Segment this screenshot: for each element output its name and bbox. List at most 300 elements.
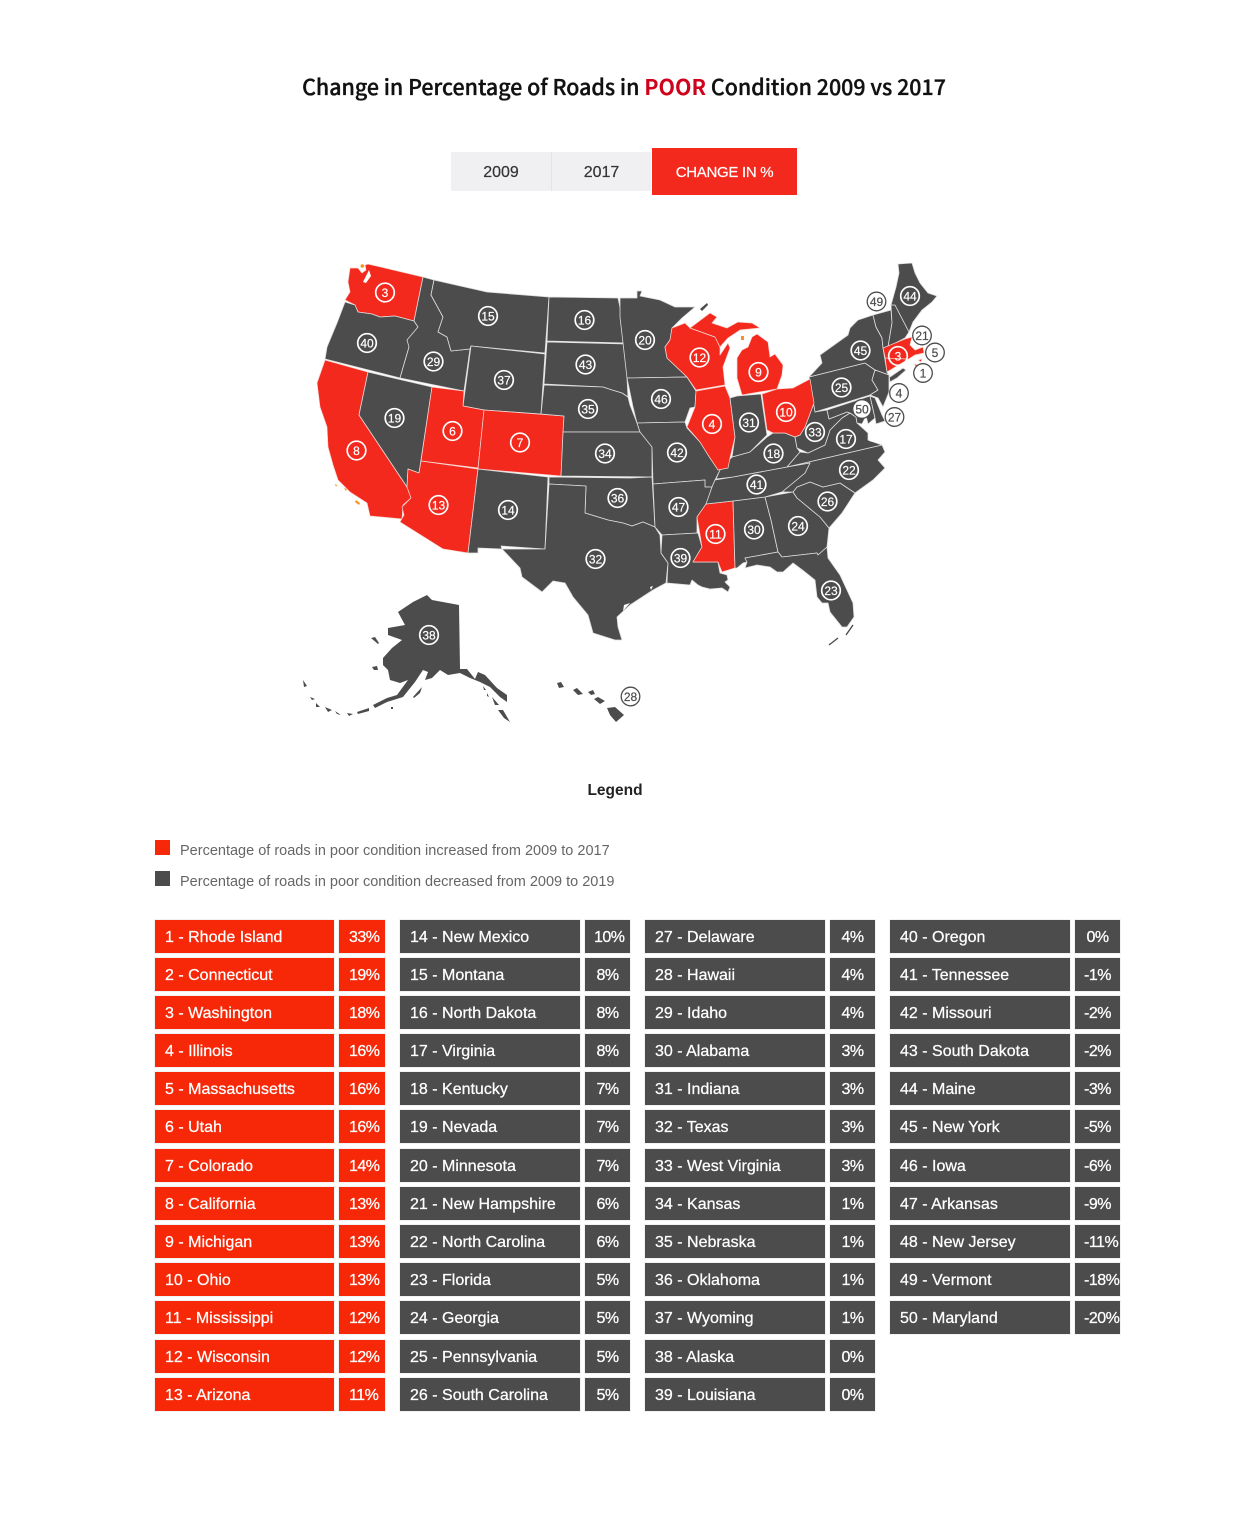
row 27: 27 - Delaware — [655, 929, 755, 946]
row 26 — [399, 1377, 631, 1412]
state: Delaware and Delmarva — [870, 396, 885, 424]
badge: 11 — [706, 525, 725, 543]
row 39: 39 - Louisiana — [655, 1387, 756, 1404]
row 3 — [154, 995, 386, 1030]
state: Oklahoma — [549, 477, 655, 527]
badge: 21 outside — [913, 326, 931, 345]
badge: 9 — [749, 363, 768, 381]
row 24 — [399, 1300, 631, 1335]
row 47: -9% — [1084, 1196, 1111, 1213]
row 23: 23 - Florida — [410, 1272, 491, 1289]
row 8 — [154, 1186, 386, 1221]
row 11 — [154, 1300, 386, 1335]
row 20 — [399, 1148, 631, 1183]
badge: 34: 34 — [598, 447, 612, 461]
state: Nebraska — [541, 385, 640, 432]
row 43: -2% — [1084, 1043, 1111, 1060]
row 5: 5 - Massachusetts — [165, 1081, 295, 1098]
state: New Hampshire — [888, 305, 909, 347]
row 34 — [644, 1186, 876, 1221]
state: Colorado — [478, 410, 564, 476]
badge: 27 outside — [885, 408, 904, 426]
badge: 39: 39 — [674, 552, 687, 566]
state: Maryland — [827, 396, 875, 424]
badge: 6: 6 — [449, 424, 456, 438]
badge: 4 outside: 4 — [896, 386, 903, 400]
badge: 4 Illinois — [703, 415, 721, 433]
badge: 38 — [420, 626, 438, 644]
row 41: 41 - Tennessee — [900, 967, 1009, 984]
badge: 17: 17 — [839, 432, 853, 446]
row 9: 13% — [349, 1234, 380, 1251]
row 40: 40 - Oregon — [900, 929, 985, 946]
badge: 37 — [495, 371, 513, 389]
row 10: 13% — [349, 1272, 380, 1289]
badge: 10 — [777, 403, 795, 421]
badge: 45: 45 — [854, 344, 867, 358]
row 21 — [399, 1186, 631, 1221]
row 4 — [154, 1033, 386, 1068]
row 18: 18 - Kentucky — [410, 1081, 508, 1098]
row 1: 1 - Rhode Island — [165, 929, 282, 946]
state: Nevada — [359, 372, 432, 487]
state: Idaho — [400, 277, 470, 391]
state: Illinois — [687, 386, 735, 470]
badge: 49 outside — [867, 292, 886, 311]
row 15: 8% — [596, 967, 619, 984]
badge: 15: 15 — [481, 310, 495, 324]
row 20: 20 - Minnesota — [410, 1158, 516, 1175]
badge: 16: 16 — [578, 314, 591, 328]
row 29 — [644, 995, 876, 1030]
badge: 46 — [652, 390, 670, 408]
state: California — [317, 360, 411, 519]
row 6: 6 - Utah — [165, 1119, 222, 1136]
badge: 10: 10 — [779, 406, 793, 420]
row 5: 16% — [349, 1081, 380, 1098]
state: Montana — [431, 280, 549, 353]
row 25 — [399, 1339, 631, 1374]
row 12 — [154, 1339, 386, 1374]
lower peninsula: Michigan — [737, 334, 783, 395]
badge: 44: 44 — [903, 290, 917, 304]
row 30 — [644, 1033, 876, 1068]
tab: 2009: 2009 — [483, 164, 519, 181]
badge: 18 — [764, 444, 783, 463]
badge: 6 — [443, 422, 462, 440]
state: Wyoming — [463, 346, 545, 414]
badge: 23: 23 — [824, 584, 838, 598]
row 2: 2 - Connecticut — [165, 967, 273, 984]
state: Tennessee — [706, 463, 810, 504]
state: North Dakota — [547, 297, 626, 343]
row 24: 24 - Georgia — [410, 1310, 499, 1327]
row 14: 10% — [594, 929, 625, 946]
row 39: 0% — [841, 1387, 864, 1404]
states: Massachusetts, Connecticut, Rhode Island — [883, 337, 924, 372]
upper peninsula: Michigan — [690, 313, 760, 347]
row 35: 1% — [841, 1234, 864, 1251]
island: Isle Royale — [700, 303, 708, 311]
row 23 — [399, 1262, 631, 1297]
badge: 46: 46 — [654, 392, 668, 406]
state: Pennsylvania — [809, 363, 878, 412]
row 22: 22 - North Carolina — [410, 1234, 545, 1251]
row 17: 8% — [596, 1043, 619, 1060]
legend text: increased: Percentage of roads in poor condition increased from 2009 to 2017 — [180, 843, 610, 859]
badge: 17 — [837, 430, 855, 448]
row 17 — [399, 1033, 631, 1068]
badge: 3 Washington: 3 — [382, 286, 389, 300]
state: Alaska — [373, 595, 507, 708]
state: Iowa — [627, 377, 696, 423]
row 34: 1% — [841, 1196, 864, 1213]
badge: 5 outside — [926, 343, 944, 362]
badge: 29 — [424, 352, 443, 371]
row 38: 0% — [841, 1349, 864, 1366]
row 21: 21 - New Hampshire — [410, 1196, 556, 1213]
badge: 13 — [429, 496, 448, 514]
orange islands — [335, 264, 744, 505]
row 19 — [399, 1109, 631, 1144]
row 11: 11 - Mississippi — [165, 1310, 273, 1327]
tab: 2009 — [451, 152, 552, 191]
badge: 9: 9 — [755, 366, 762, 380]
row 47: 47 - Arkansas — [900, 1196, 998, 1213]
row 8: 8 - California — [165, 1196, 256, 1213]
row 42: 42 - Missouri — [900, 1005, 992, 1022]
row 12: 12 - Wisconsin — [165, 1349, 270, 1366]
state: Washington — [345, 264, 423, 321]
row 32: 3% — [841, 1119, 864, 1136]
badge: 8 — [347, 441, 366, 460]
row 48: -11% — [1084, 1234, 1118, 1251]
row 7: 7 - Colorado — [165, 1158, 253, 1175]
row 27: 4% — [841, 929, 864, 946]
tab: 2017 — [552, 152, 651, 191]
row 38 — [645, 1340, 875, 1373]
row 13 — [154, 1377, 386, 1412]
state: Wisconsin — [665, 323, 730, 390]
row 44 — [890, 1072, 1120, 1105]
badge: 42 — [668, 443, 686, 462]
badge: 35 — [579, 400, 597, 418]
badge: 18: 18 — [767, 447, 780, 461]
row 50 — [890, 1301, 1120, 1334]
state: Indiana — [730, 394, 767, 457]
row 21: 6% — [596, 1196, 619, 1213]
state: Arkansas — [653, 480, 712, 535]
state: Georgia — [765, 492, 829, 557]
row 33: 33 - West Virginia — [655, 1158, 781, 1175]
row 3: 3 - Washington — [165, 1005, 272, 1022]
row 36: 1% — [841, 1272, 864, 1289]
row 9 — [154, 1224, 386, 1259]
badge: 34 — [596, 444, 614, 463]
row 19: 19 - Nevada — [410, 1119, 497, 1136]
state: Texas — [502, 484, 668, 640]
badge: 47: 47 — [672, 500, 685, 514]
badge: 12 — [690, 348, 709, 367]
badge: 31: 31 — [742, 416, 756, 430]
row 46 — [890, 1149, 1120, 1182]
row 12: 12% — [349, 1349, 380, 1366]
badge: 45 — [851, 341, 870, 360]
islands: Alaska — [303, 637, 510, 722]
badge: 3 Connecticut — [889, 347, 907, 365]
row 40: 0% — [1086, 929, 1109, 946]
badge: 33 — [806, 423, 824, 441]
title: Change in Percentage of Roads in POOR Condition 2009 vs 2017 — [302, 71, 946, 102]
badge: 39 — [671, 549, 690, 567]
badge: 47 — [669, 498, 688, 516]
row 1 — [154, 919, 386, 954]
state: New York — [809, 315, 906, 382]
row 7: 14% — [349, 1158, 380, 1175]
badge: 15 — [479, 307, 497, 325]
row 31: 3% — [841, 1081, 864, 1098]
row 48: 48 - New Jersey — [900, 1234, 1016, 1251]
row 18: 7% — [596, 1081, 619, 1098]
state: Virginia — [787, 413, 882, 467]
row 41 — [890, 958, 1120, 991]
state: Ohio — [762, 379, 814, 437]
badge: 5 outside: 5 — [932, 346, 939, 360]
badge: 14: 14 — [501, 504, 515, 518]
legend swatch: increased — [155, 840, 170, 855]
row 42: -2% — [1084, 1005, 1111, 1022]
badge: 40: 40 — [360, 336, 374, 350]
badge: 26 — [818, 492, 837, 511]
state: South Carolina — [793, 482, 855, 528]
row 10 — [154, 1262, 386, 1297]
badge: 20 — [636, 331, 654, 349]
row 13: 11% — [349, 1387, 378, 1404]
state: Mississippi — [693, 501, 735, 572]
tab: change in percent (active) — [652, 148, 797, 195]
state: Utah — [421, 387, 484, 468]
badge: 28 outside — [621, 687, 640, 706]
row 50: -20% — [1084, 1310, 1119, 1327]
row 40 — [890, 920, 1120, 953]
badge: 25: 25 — [835, 381, 848, 395]
row 34: 34 - Kansas — [655, 1196, 740, 1213]
tab: change in percent (active): CHANGE IN % — [676, 164, 773, 181]
badge: 29: 29 — [427, 355, 440, 369]
badge: 24: 24 — [791, 520, 805, 534]
row 37: 1% — [841, 1310, 864, 1327]
badge: 1 outside: 1 — [920, 366, 927, 380]
row 25: 5% — [596, 1349, 619, 1366]
badge: 40 — [358, 334, 376, 352]
row 44: 44 - Maine — [900, 1081, 976, 1098]
row 26: 5% — [596, 1387, 619, 1404]
badge: 22: 22 — [842, 464, 856, 478]
badge: 50 outside — [853, 400, 871, 418]
row 31 — [644, 1071, 876, 1106]
row 46: 46 - Iowa — [900, 1158, 966, 1175]
row 38: 38 - Alaska — [655, 1349, 734, 1366]
row 45 — [890, 1110, 1120, 1143]
badge: 31 — [740, 413, 758, 432]
state: Vermont — [873, 310, 892, 348]
badge: 36: 36 — [611, 492, 624, 506]
badge: 27 outside: 27 — [888, 410, 901, 424]
badge: 25 — [832, 378, 851, 397]
badge: 28 outside: 28 — [624, 690, 637, 704]
state: Minnesota — [620, 291, 695, 378]
row 5 — [154, 1071, 386, 1106]
badge: 38: 38 — [422, 628, 436, 642]
row 9: 9 - Michigan — [165, 1234, 252, 1251]
state: West Virginia — [795, 403, 850, 453]
row 7 — [154, 1148, 386, 1183]
badge: 12: 12 — [693, 351, 706, 365]
badge: 11: 11 — [709, 528, 722, 542]
badge: 24 — [789, 517, 807, 535]
row 35: 35 - Nebraska — [655, 1234, 756, 1251]
Texas coast bays — [618, 586, 653, 627]
row 22: 6% — [596, 1234, 619, 1251]
row 1: 33% — [349, 929, 380, 946]
badge: 19 — [385, 409, 404, 427]
row 28 — [644, 957, 876, 992]
badge: 41: 41 — [750, 478, 763, 492]
table column 2 — [399, 919, 631, 1412]
row 30: 30 - Alabama — [655, 1043, 749, 1060]
row 45: -5% — [1084, 1119, 1111, 1136]
badge: 21 outside: 21 — [915, 329, 929, 343]
row 37: 37 - Wyoming — [655, 1310, 754, 1327]
badge: 42: 42 — [670, 446, 684, 460]
row 28: 4% — [841, 967, 864, 984]
table column 1 — [154, 919, 386, 1412]
row 25: 25 - Pennsylvania — [410, 1349, 537, 1366]
row 16 — [399, 995, 631, 1030]
row 30: 3% — [841, 1043, 864, 1060]
badge: 8: 8 — [353, 444, 360, 458]
badge: 4 outside — [890, 384, 908, 402]
state: Florida — [745, 547, 854, 627]
row 36: 36 - Oklahoma — [655, 1272, 760, 1289]
state: Missouri — [637, 422, 720, 487]
row 2 — [154, 957, 386, 992]
state: New Mexico — [468, 469, 548, 553]
state: Alabama — [733, 497, 778, 568]
badge: 13: 13 — [432, 498, 445, 512]
badge: 43 — [576, 355, 595, 374]
badge: 43: 43 — [579, 358, 592, 372]
row 49: 49 - Vermont — [900, 1272, 992, 1289]
row 8: 13% — [349, 1196, 380, 1213]
row 49 — [890, 1263, 1120, 1296]
row 19: 7% — [596, 1119, 619, 1136]
row 33 — [644, 1148, 876, 1183]
row 11: 12% — [349, 1310, 380, 1327]
badge: 4 Illinois: 4 — [709, 418, 716, 432]
state: Kansas — [561, 432, 652, 477]
tab: 2017: 2017 — [584, 164, 619, 181]
row 29: 29 - Idaho — [655, 1005, 727, 1022]
row 16: 8% — [596, 1005, 619, 1022]
row 18 — [399, 1071, 631, 1106]
Puget Sound inlet — [363, 270, 371, 283]
row 32 — [644, 1109, 876, 1144]
state: North Carolina — [782, 445, 885, 493]
state: Maine — [891, 263, 937, 332]
badge: 26: 26 — [821, 495, 834, 509]
badge: 14 — [499, 501, 517, 519]
row 14 — [399, 919, 631, 954]
row 28: 28 - Hawaii — [655, 967, 735, 984]
row 49: -18% — [1084, 1272, 1119, 1289]
row 29: 4% — [841, 1005, 864, 1022]
badge: 19: 19 — [388, 412, 401, 426]
badge: 35: 35 — [581, 402, 595, 416]
table column 3 — [644, 919, 876, 1412]
badge: 33: 33 — [808, 426, 822, 440]
row 15: 15 - Montana — [410, 967, 504, 984]
badge: 30 — [745, 520, 763, 539]
badge: 20: 20 — [638, 334, 652, 348]
badge: 41 — [747, 475, 766, 494]
row 45: 45 - New York — [900, 1119, 1000, 1136]
row 32: 32 - Texas — [655, 1119, 729, 1136]
badge: 3 Connecticut: 3 — [895, 350, 902, 364]
row 13: 13 - Arizona — [165, 1387, 250, 1404]
badge: 3 Washington — [376, 283, 394, 302]
badge: 32 — [586, 550, 605, 568]
state: South Dakota — [544, 342, 628, 397]
row 48 — [890, 1225, 1120, 1258]
row 47 — [890, 1187, 1120, 1220]
badge: 50 outside: 50 — [855, 402, 869, 416]
row 37 — [645, 1301, 875, 1334]
row 31: 31 - Indiana — [655, 1081, 740, 1098]
state: Arizona — [400, 461, 478, 553]
map of the United States — [303, 262, 945, 722]
Florida Keys — [829, 625, 853, 645]
row 41: -1% — [1084, 967, 1111, 984]
badge: 36 — [608, 489, 627, 507]
row 33: 3% — [841, 1158, 864, 1175]
legend heading: Legend — [587, 782, 643, 799]
row 15 — [399, 957, 631, 992]
badge: 49 outside: 49 — [870, 295, 883, 309]
legend swatch: decreased — [155, 871, 170, 886]
row 27 — [644, 919, 876, 954]
islands: Massachusetts and Rhode Island — [914, 359, 922, 367]
row 26: 26 - South Carolina — [410, 1387, 548, 1404]
row 16: 16 - North Dakota — [410, 1005, 536, 1022]
badge: 7 — [511, 433, 529, 452]
badge: 16 — [575, 311, 594, 329]
row 14: 14 - New Mexico — [410, 929, 529, 946]
row 3: 18% — [349, 1005, 380, 1022]
badge: 37: 37 — [497, 374, 511, 388]
row 35 — [645, 1225, 875, 1258]
row 24: 5% — [596, 1310, 619, 1327]
row 50: 50 - Maryland — [900, 1310, 998, 1327]
legend text: decreased: Percentage of roads in poor condition decreased from 2009 to 2019 — [180, 874, 614, 890]
badge: 30: 30 — [747, 523, 761, 537]
row 42 — [890, 996, 1120, 1029]
state: New Jersey — [870, 370, 889, 407]
row 17: 17 - Virginia — [410, 1043, 495, 1060]
badge: 7: 7 — [517, 436, 524, 450]
row 43 — [890, 1034, 1120, 1067]
badge: 23 — [822, 581, 840, 600]
